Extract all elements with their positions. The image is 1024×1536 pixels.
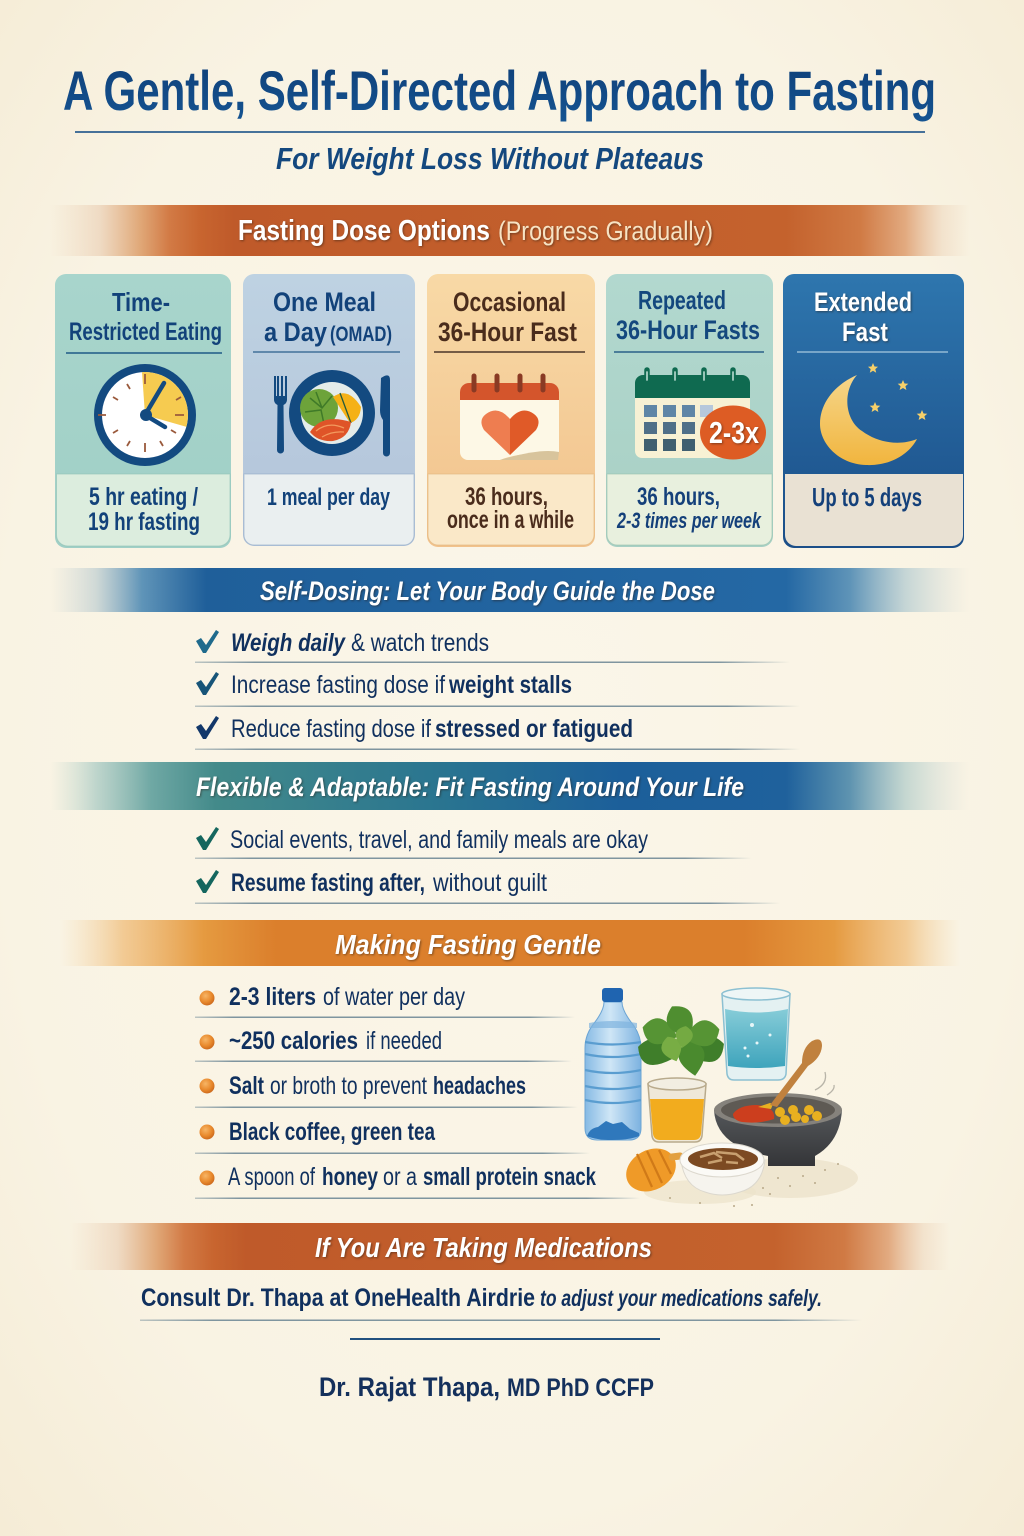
item: calories: if needed <box>366 1027 442 1055</box>
item: reduce fasting dose <box>195 715 800 750</box>
item: resume fasting <box>195 869 780 904</box>
item: increase fasting dose <box>195 671 800 707</box>
icon: crescent moon and stars <box>820 363 927 465</box>
illustration: water, herbs, broth and snacks <box>585 988 858 1207</box>
card: extended fast: Up to 5 days <box>812 482 922 512</box>
section banner: medications: If You Are Taking Medications <box>315 1232 652 1263</box>
section banner: fasting dose options <box>50 205 970 256</box>
icon: white bowl of snack <box>680 1143 765 1195</box>
steam lines <box>815 1072 834 1095</box>
card: occasional 36-hour fast <box>427 274 595 547</box>
author credit: Dr. Rajat Thapa, <box>319 1372 500 1402</box>
speckled shadow <box>644 1158 858 1207</box>
card: occasional 36-hour fast: 36-Hour Fast <box>438 317 577 347</box>
icon: calendar with 2-3x badge <box>635 370 766 460</box>
card: repeated 36-hour fasts: Repeated <box>638 285 726 315</box>
card: time-restricted eating <box>55 274 231 548</box>
item: honey or protein snack: honey <box>322 1163 378 1191</box>
icon: water bottle <box>585 988 641 1140</box>
card: extended fast: Fast <box>842 317 888 347</box>
section banner: self-dosing: Self-Dosing: Let Your Body Guide the Dose <box>260 576 715 606</box>
checklist: self-dosing <box>195 629 800 750</box>
list: gentle fasting tips <box>195 983 640 1199</box>
card: time-restricted eating: 5 hr eating / <box>89 483 198 511</box>
icon: plate with fork and knife <box>274 370 390 456</box>
item: water <box>195 983 575 1018</box>
card: repeated 36-hour fasts: 36 hours, <box>637 483 720 511</box>
card: occasional 36-hour fast: Occasional <box>453 287 566 317</box>
icon: calendar with heart <box>460 376 559 460</box>
author credit <box>319 1372 654 1402</box>
medication advice: Consult Dr. Thapa at OneHealth Airdrie <box>141 1284 535 1312</box>
card: extended fast <box>783 274 964 548</box>
item: water: of water per day <box>323 983 465 1011</box>
card: one meal a day: (OMAD) <box>330 323 392 346</box>
card: time-restricted eating: 19 hr fasting <box>88 508 200 536</box>
checklist: flexible and adaptable <box>195 826 780 904</box>
subtitle: For Weight Loss Without Plateaus <box>276 141 704 176</box>
card: repeated 36-hour fasts <box>606 274 773 547</box>
item: reduce fasting dose: stressed or fatigued <box>435 715 633 743</box>
item: weigh daily: & watch trends <box>351 629 489 657</box>
card: extended fast: Extended <box>814 287 912 317</box>
item: water: 2-3 liters <box>229 983 316 1011</box>
item: honey or protein snack: small protein snack <box>423 1163 596 1191</box>
icon: clock <box>94 364 196 466</box>
icon: glass of water <box>722 988 790 1080</box>
section banner: fasting dose options: (Progress Gradually) <box>498 216 713 246</box>
item: increase fasting dose: Increase fasting dose if <box>231 671 445 699</box>
item: social events: Social events, travel, and family meals are okay <box>230 826 648 854</box>
section banner: making fasting gentle: Making Fasting Gentle <box>335 929 601 960</box>
section banner: self-dosing <box>50 568 970 612</box>
item: reduce fasting dose: Reduce fasting dose if <box>231 715 431 743</box>
item: salt or broth <box>195 1072 578 1108</box>
card: one meal a day: 1 meal per day <box>267 484 390 511</box>
item: salt or broth: Salt <box>229 1072 265 1100</box>
section banner: making fasting gentle <box>60 920 960 966</box>
item: coffee and tea <box>195 1118 590 1154</box>
card: occasional 36-hour fast: 36 hours, <box>465 483 548 511</box>
item: salt or broth: or broth to prevent <box>270 1072 427 1100</box>
icon: mint leaves <box>634 1000 728 1078</box>
item: resume fasting: without guilt <box>432 869 547 897</box>
section banner: fasting dose options: Fasting Dose Options <box>238 215 490 247</box>
card: one meal a day <box>243 274 415 546</box>
item: resume fasting: Resume fasting after, <box>231 869 425 897</box>
icon: stone bowl of broth <box>714 1093 842 1166</box>
item: increase fasting dose: weight stalls <box>448 671 572 699</box>
item: coffee and tea: Black coffee, green tea <box>229 1118 436 1146</box>
medication advice <box>140 1284 862 1321</box>
author credit: MD PhD CCFP <box>507 1374 654 1402</box>
card: time-restricted eating: Time- <box>112 287 170 317</box>
card: occasional 36-hour fast: once in a while <box>447 506 574 534</box>
item: weigh daily: Weigh daily <box>231 629 346 657</box>
item: calories <box>195 1027 572 1062</box>
icon: glass of juice <box>648 1078 706 1142</box>
section banner: medications <box>70 1223 950 1270</box>
icon: wooden spoon <box>770 1039 822 1107</box>
item: honey or protein snack: A spoon of <box>228 1163 315 1191</box>
section banner: flexible and adaptable <box>50 762 970 810</box>
medication advice: to adjust your medications safely. <box>540 1285 822 1311</box>
card: repeated 36-hour fasts: 36-Hour Fasts <box>616 315 760 345</box>
card: one meal a day: a Day <box>264 317 327 347</box>
item: honey or protein snack <box>195 1163 640 1199</box>
item: calories: ~250 calories <box>229 1027 358 1055</box>
item: weigh daily <box>195 629 790 663</box>
card: repeated 36-hour fasts: 2-3 times per week <box>616 508 762 533</box>
item: salt or broth: headaches <box>433 1072 526 1100</box>
item: honey or protein snack: or a <box>383 1163 417 1191</box>
divider <box>350 1338 660 1340</box>
icon: honey dipper <box>619 1140 683 1200</box>
section banner: flexible and adaptable: Flexible & Adaptable: Fit Fasting Around Your Life <box>196 772 744 802</box>
icon: calendar with 2-3x badge: 2-3x <box>709 415 760 450</box>
card: one meal a day: One Meal <box>273 287 376 317</box>
card: time-restricted eating: Restricted Eating <box>69 318 222 346</box>
